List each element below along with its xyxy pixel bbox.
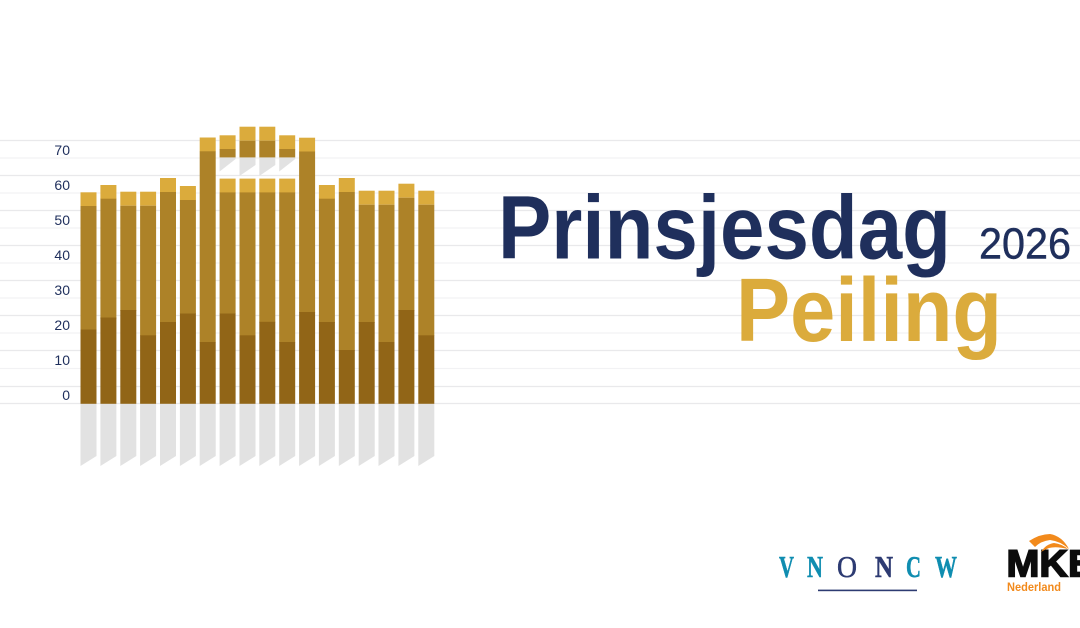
stacked bar chart bbox=[80, 127, 434, 404]
logo: VNO-NCW: W bbox=[935, 549, 957, 584]
logo: VNO-NCW bbox=[779, 549, 957, 591]
bar shadows bbox=[80, 157, 434, 466]
year: 2026: 2026 bbox=[979, 220, 1071, 268]
logo: VNO-NCW: O bbox=[837, 549, 857, 584]
title: Prinsjesdag: Prinsjesdag bbox=[498, 178, 951, 278]
y axis labels: 70 bbox=[54, 142, 70, 158]
logo: VNO-NCW: N bbox=[807, 549, 823, 584]
y axis labels: 30 bbox=[54, 282, 70, 298]
logo: MKB Nederland: Nederland bbox=[1007, 582, 1061, 594]
title: Peiling: Peiling bbox=[736, 261, 1002, 361]
y axis labels: 10 bbox=[54, 352, 70, 368]
logo: VNO-NCW: C bbox=[906, 549, 921, 584]
y axis labels: 50 bbox=[54, 212, 70, 228]
y axis labels: 40 bbox=[54, 247, 70, 263]
bars: bottom segment bbox=[80, 310, 434, 404]
y axis labels: 0 bbox=[62, 387, 70, 403]
logo: VNO-NCW: V bbox=[779, 549, 794, 584]
y axis labels: 60 bbox=[54, 177, 70, 193]
bars: top segment bbox=[80, 127, 434, 206]
bars: middle segment bbox=[80, 141, 434, 350]
y axis labels: 20 bbox=[54, 317, 70, 333]
y axis labels bbox=[54, 142, 70, 403]
logo: VNO-NCW: N bbox=[875, 549, 893, 584]
